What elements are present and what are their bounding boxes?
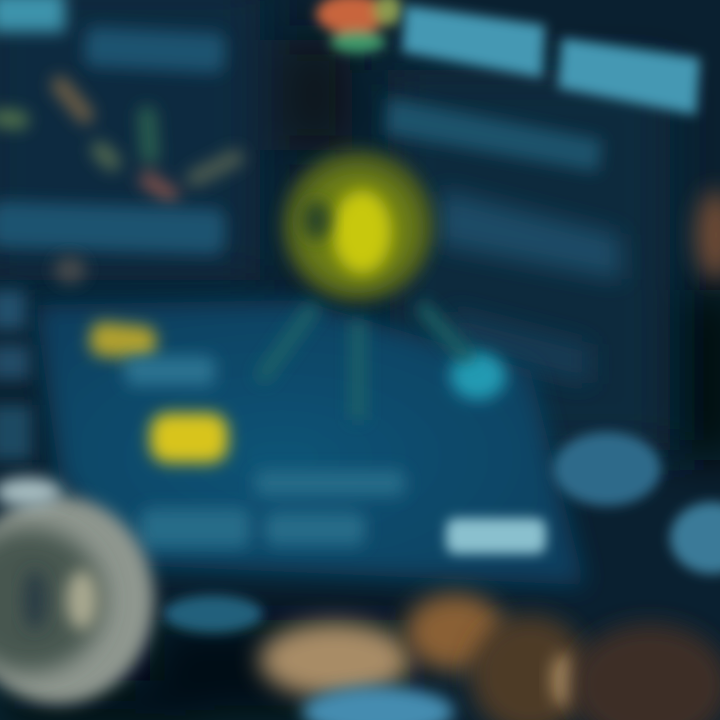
text block: subtitle <box>385 98 602 172</box>
panel: top right text <box>385 5 720 385</box>
text block: badge caption <box>125 356 215 386</box>
label: yellow badge top <box>88 321 158 361</box>
chart lines on card <box>260 305 470 420</box>
text block: right column line two <box>450 310 590 385</box>
button: card action <box>446 518 546 554</box>
icon: small brown marker <box>54 256 86 284</box>
panel: teal card <box>35 300 585 585</box>
bubbles: right ovals <box>163 432 720 633</box>
text block: top left subheading <box>84 26 226 74</box>
label: yellow badge bottom <box>150 413 228 463</box>
icon: silver coin <box>0 477 154 704</box>
heading: top left label <box>0 0 65 32</box>
title <box>402 5 700 115</box>
text block: left lower label <box>0 201 226 255</box>
left dark-blue stack <box>0 290 32 460</box>
icon: yellow coin <box>282 150 434 302</box>
icon: bronze coins <box>259 594 720 720</box>
panel: top left chart <box>0 0 235 284</box>
icon: cyan dot <box>450 352 506 400</box>
icon: right edge brown object <box>696 190 720 280</box>
icon: blue lower coin <box>302 686 454 720</box>
icon: multicolour logo <box>316 0 402 53</box>
text block: right column line one <box>438 190 622 280</box>
text block: card text <box>140 470 405 548</box>
line chart <box>0 85 235 195</box>
